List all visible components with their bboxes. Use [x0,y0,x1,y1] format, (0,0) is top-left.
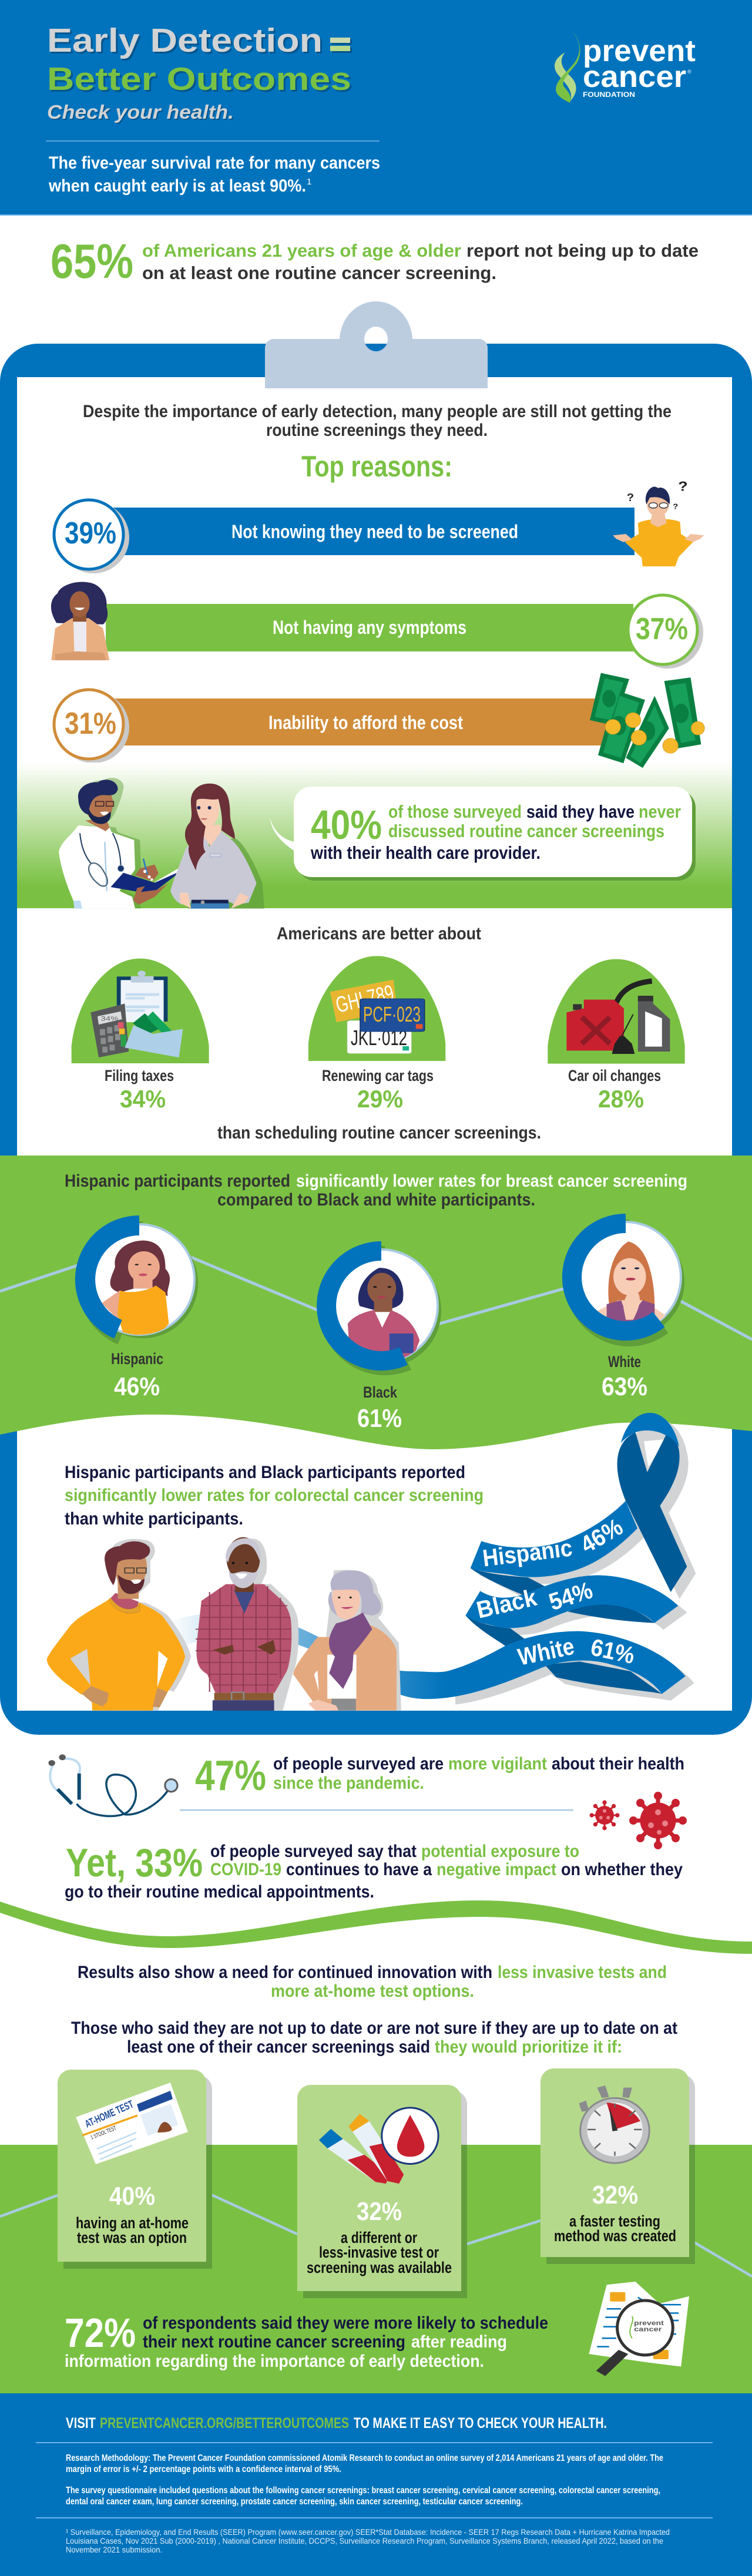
text: need for innovation: more at-home test options. [271,1981,474,2001]
stat: yet 33% negative impact: of people surveyed say that [210,1842,417,1861]
callout: 40% never discussed: of those surveyed [388,801,522,822]
icon: magnifier on document [589,2282,689,2376]
card: faster testing: method was created [554,2227,676,2245]
footnote: Louisiana Cases, Nov 2021 Sub (2000-2019) , National Cancer Institute, DCCPS, Surveillance Research Program, Surveillance Systems Branch, released April 2022, based on the [66,2536,663,2545]
card: less-invasive test: a different or [341,2229,417,2246]
icon: ribbon chart [446,1413,696,1705]
card: less-invasive test [297,2085,467,2298]
ribbon tail behind people [170,1613,446,1699]
panel: renewing car tags [308,956,445,1113]
stat: 72% more likely: of respondents said they were more likely to schedule [143,2313,548,2333]
icon: license plates [308,956,445,1061]
icon: confused person [613,479,704,566]
panel: breast cancer screening band [0,1156,752,1449]
icon: at-home test kit: 1 STOOL TEST [90,2125,118,2141]
panel: discussion with provider [17,763,732,909]
survival rate text: when caught early is at least 90%. [48,176,306,196]
logo [555,31,696,103]
card: less-invasive test: 32% [357,2197,402,2226]
callout: 40% never discussed: said they have [526,801,634,822]
survival rate text [48,153,380,196]
donut: Hispanic 46% [75,1215,198,1401]
donut: Hispanic 46%: 46% [114,1372,160,1401]
stat: 47% more vigilant: 47% [195,1752,266,1799]
icon: clipboard, calculator, envelope [72,959,209,1063]
text: colorectal screening [65,1463,484,1529]
icon: ribbon chart: 61% [588,1633,637,1669]
reason bar: 39% [54,500,634,573]
panel: car oil changes: 28% [598,1085,644,1113]
reason bar: 31% [54,690,614,763]
donut: White 63%: 63% [602,1372,647,1401]
icon: woman with crossed arms [51,582,109,660]
panel: filing taxes: Filing taxes [105,1067,174,1084]
callout: 40% never discussed: never [639,801,681,822]
panel: footer [0,2393,752,2576]
intro text: Despite the importance of early detection, many people are still not getting the [83,402,672,421]
stat: 47% more vigilant [48,1752,684,1816]
text: need for innovation: less invasive tests and [498,1963,667,1982]
call to action: TO MAKE IT EASY TO CHECK YOUR HEALTH. [354,2415,607,2431]
stat: yet 33% negative impact: potential exposure to [421,1842,579,1861]
stat: 72% more likely: 72% [65,2310,136,2356]
card: faster testing: a faster testing [569,2212,660,2230]
reason bar: 39%: 39% [65,516,116,550]
panel: prioritize band [0,2068,752,2393]
callout: 40% never discussed: with their health care provider. [310,842,540,863]
donut: Black 61% [317,1241,441,1433]
research methodology [66,2453,663,2507]
title: Early Detection [47,22,323,59]
text: than scheduling: than scheduling routine cancer screenings. [217,1123,541,1143]
reason bar: 37%: Not having any symptoms [273,617,466,638]
logo: FOUNDATION [583,90,635,99]
call to action: VISIT [66,2415,96,2431]
icon: gas can and oil [548,959,685,1064]
reason bar: 31%: 31% [65,707,116,741]
icon: magnifier on document: cancer [634,2326,662,2333]
reason bar: 37%: 37% [636,612,688,646]
text: need for innovation: Results also show a need for continued innovation with [78,1963,492,1982]
man in plaid shirt [196,1537,298,1711]
panel: clipboard board [0,344,752,1735]
stat: 72% more likely [65,2310,548,2371]
stat: 65% not up to date [51,234,699,288]
callout: 40% never discussed: 40% [311,802,382,848]
reason bar: 39%: Not knowing they need to be screened [231,521,518,542]
icon: stopwatch [579,2085,649,2163]
icon: virus particles [590,1792,687,1849]
man in yellow sweater [47,1539,191,1711]
call to action [66,2415,607,2431]
stat: 47% more vigilant: since the pandemic. [273,1774,424,1793]
card: faster testing [540,2068,695,2264]
card: at-home test: 40% [109,2182,155,2211]
heading: top reasons: Top reasons: [301,450,452,483]
stat: 65% not up to date: 65% [51,234,133,288]
icon: blood tubes [319,2108,438,2184]
icon: doctor and patient [59,778,264,909]
icon: confused person: ? [627,491,634,503]
header panel [0,0,752,216]
text: would prioritize if [71,2019,677,2057]
panel: renewing car tags: 29% [357,1085,403,1113]
footnote: ¹ Surveillance, Epidemiology, and End Results (SEER) Program (www.seer.cancer.gov) SEER*Stat Database: Incidence - SEER 17 Regs Research Data + Hurricane Katrina Impacted [66,2527,670,2537]
stat: yet 33% negative impact: negative impact [437,1860,556,1879]
heading: breast cancer [65,1171,687,1210]
donut: Black 61%: 61% [357,1404,402,1433]
research methodology: margin of error is +/- 2 percentage points with a confidence interval of 95%. [66,2464,341,2474]
text: Americans are better about: Americans are better about [277,924,481,943]
text: colorectal screening: than white participants. [65,1509,243,1529]
stat: yet 33% negative impact: on whether they [561,1860,683,1879]
title [47,22,351,97]
call to action: PREVENTCANCER.ORG/BETTEROUTCOMES [100,2415,349,2431]
icon: license plates: JKL·012 [351,1026,407,1050]
intro text [83,402,672,440]
card: less-invasive test: less-invasive test or [319,2243,439,2261]
stat: 72% more likely: their next routine cancer screening [143,2332,405,2352]
panel: car oil changes [548,959,685,1113]
stat: yet 33% negative impact: go to their routine medical appointments. [65,1882,374,1902]
icon: ribbon chart: Black [474,1584,539,1624]
icon: stethoscope [48,1754,177,1816]
research methodology: dental oral cancer exam, lung cancer screening, prostate cancer screening, skin cancer screening, testicular cancer screening. [66,2497,523,2507]
text: colorectal screening: Hispanic participants and Black participants reported [65,1463,465,1482]
subtitle: Check your health. [47,101,234,123]
panel: car oil changes: Car oil changes [568,1067,661,1084]
icon: magnifier on document: prevent [634,2320,664,2327]
icon: ribbon chart: 46% [576,1513,627,1559]
stat: yet 33% negative impact [65,1841,683,1902]
survival rate text: 1 [307,177,311,187]
icon: money [590,673,704,768]
heading: breast cancer: Hispanic participants reported [65,1171,290,1191]
footnote [66,2527,670,2554]
heading: breast cancer: compared to Black and white participants. [217,1190,535,1210]
reason bar: 37% [106,595,703,669]
stat: 65% not up to date: report not being up to date [466,240,699,261]
bottom edge of clipboard over people [17,1711,732,1712]
card: less-invasive test: screening was available [307,2259,452,2276]
panel: filing taxes: 34% [120,1085,166,1113]
stat: yet 33% negative impact: Yet, 33% [66,1841,203,1885]
callout: 40% never discussed: discussed routine cancer screenings [388,821,664,841]
icon: confused person: ? [678,479,688,494]
icon: three people [47,1537,401,1711]
logo: prevent [583,34,696,68]
panel: filing taxes [72,959,209,1113]
stat: 72% more likely: information regarding the importance of early detection. [65,2352,484,2371]
callout: 40% never discussed [270,787,696,881]
icon: clipboard, calculator, envelope: 34% [100,1015,118,1022]
stat: 47% more vigilant: of people surveyed are [273,1754,444,1774]
footnote: November 2021 submission. [66,2545,162,2554]
text: would prioritize if: least one of their cancer screenings said [127,2037,430,2057]
stat: 47% more vigilant: about their health [552,1754,684,1774]
reason bar: 31%: Inability to afford the cost [268,712,463,733]
icon: confused person: ? [673,502,678,511]
stat: 65% not up to date: on at least one routine cancer screening. [142,263,496,283]
stat: 72% more likely: after reading [411,2332,507,2352]
text: would prioritize if: they would prioritize it if: [435,2037,622,2057]
icon: license plates: PCF·023 [363,1002,421,1026]
card: faster testing: 32% [592,2181,638,2209]
text: need for innovation [78,1963,667,2001]
donut: White 63% [562,1214,684,1401]
card: at-home test: having an at-home [76,2214,189,2232]
icon: license plates: GHI 789 [334,980,396,1018]
title: Better Outcomes [47,61,351,97]
stat: 65% not up to date: of Americans 21 years of age & older [142,240,461,261]
icon: ribbon chart: Hispanic [481,1534,574,1572]
woman with scarf [293,1570,401,1711]
text: would prioritize if: Those who said they are not up to date or are not sure if they are up to date on at [71,2019,677,2038]
card: at-home test [58,2070,212,2269]
stat: 47% more vigilant: more vigilant [448,1754,547,1774]
panel: renewing car tags: Renewing car tags [322,1067,434,1084]
stat: yet 33% negative impact: COVID-19 [210,1860,281,1879]
donut: White 63%: White [608,1353,641,1371]
heading: breast cancer: significantly lower rates for breast cancer screening [296,1171,687,1191]
donut: Black 61%: Black [363,1383,398,1401]
logo: ® [687,69,691,75]
icon: ribbon chart: 54% [546,1576,596,1616]
logo: cancer [583,60,686,94]
icon: ribbon chart: White [515,1633,576,1671]
icon: at-home test kit [76,2083,188,2164]
intro text: routine screenings they need. [266,421,488,440]
survival rate text: The five-year survival rate for many cancers [49,153,380,173]
donut: Hispanic 46%: Hispanic [111,1350,163,1368]
card: at-home test: test was an option [77,2229,187,2246]
icon: clipboard clip [265,301,488,388]
stat: yet 33% negative impact: continues to have a [286,1860,432,1879]
icon: at-home test kit: AT-HOME TEST [83,2098,135,2130]
text: colorectal screening: significantly lower rates for colorectal cancer screening [65,1486,484,1505]
